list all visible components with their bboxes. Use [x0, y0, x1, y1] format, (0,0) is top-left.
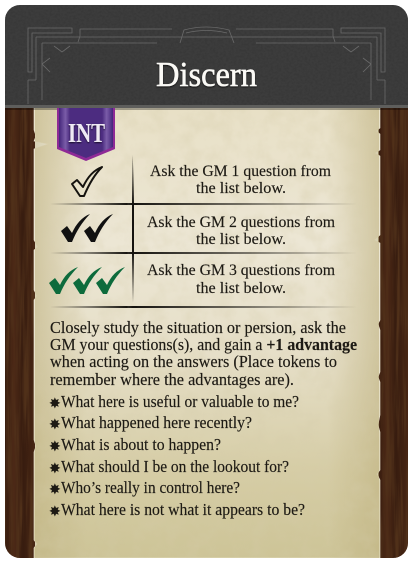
bullet 4: What should I be on the lookout for?: [61, 457, 289, 476]
row dividers: [50, 155, 357, 308]
bullet 5: Who’s really in control here?: [61, 478, 240, 497]
header ornament frame: [28, 27, 385, 104]
table: result rows: [49, 155, 357, 308]
bullet 1: What here is useful or valuable to me?: [61, 392, 299, 411]
bullet 5: ✸: [49, 482, 61, 498]
row 2 text: [147, 214, 336, 248]
badge: INT ribbon: INT: [68, 118, 105, 148]
list: questions: [49, 392, 305, 520]
text block: description: GM your questions(s), and gain a +1 advantage: [50, 335, 357, 354]
bullet 3: What is about to happen?: [61, 435, 221, 454]
row 3 text: the list below.: [196, 280, 286, 297]
text block: description: Closely study the situation or persion, ask the: [50, 318, 346, 337]
bullet 6: ✸: [49, 504, 61, 520]
row 3 text: [147, 262, 336, 297]
text block: description: [50, 318, 357, 389]
bullet 2: ✸: [49, 417, 61, 433]
row 3 text: Ask the GM 3 questions from: [147, 262, 336, 279]
icon: single outlined check: [72, 167, 102, 196]
badge: INT ribbon: [57, 108, 115, 161]
panel: left wood border: [5, 100, 35, 558]
row 1 text: the list below.: [196, 180, 286, 197]
bullet 4: ✸: [49, 461, 61, 477]
text block: description: when acting on the answers (Place tokens to: [50, 352, 337, 371]
bullet 6: What here is not what it appears to be?: [61, 500, 305, 519]
bullet 1: ✸: [49, 396, 61, 412]
row 2 text: Ask the GM 2 questions from: [147, 214, 336, 231]
row 2 text: the list below.: [196, 231, 286, 248]
panel: header: [5, 5, 408, 110]
panel: parchment: [34, 108, 380, 558]
text block: description: remember where the advantages are).: [50, 370, 294, 389]
icon: two black checks: [61, 214, 113, 242]
icon: three green checks: [49, 267, 125, 294]
title: Discern: [156, 55, 257, 94]
row 1 text: Ask the GM 1 question from: [150, 163, 332, 180]
row 1 text: [150, 163, 332, 197]
bullet 2: What happened here recently?: [61, 413, 252, 432]
panel: right wood border: [378, 100, 408, 558]
bullet 3: ✸: [49, 439, 61, 455]
